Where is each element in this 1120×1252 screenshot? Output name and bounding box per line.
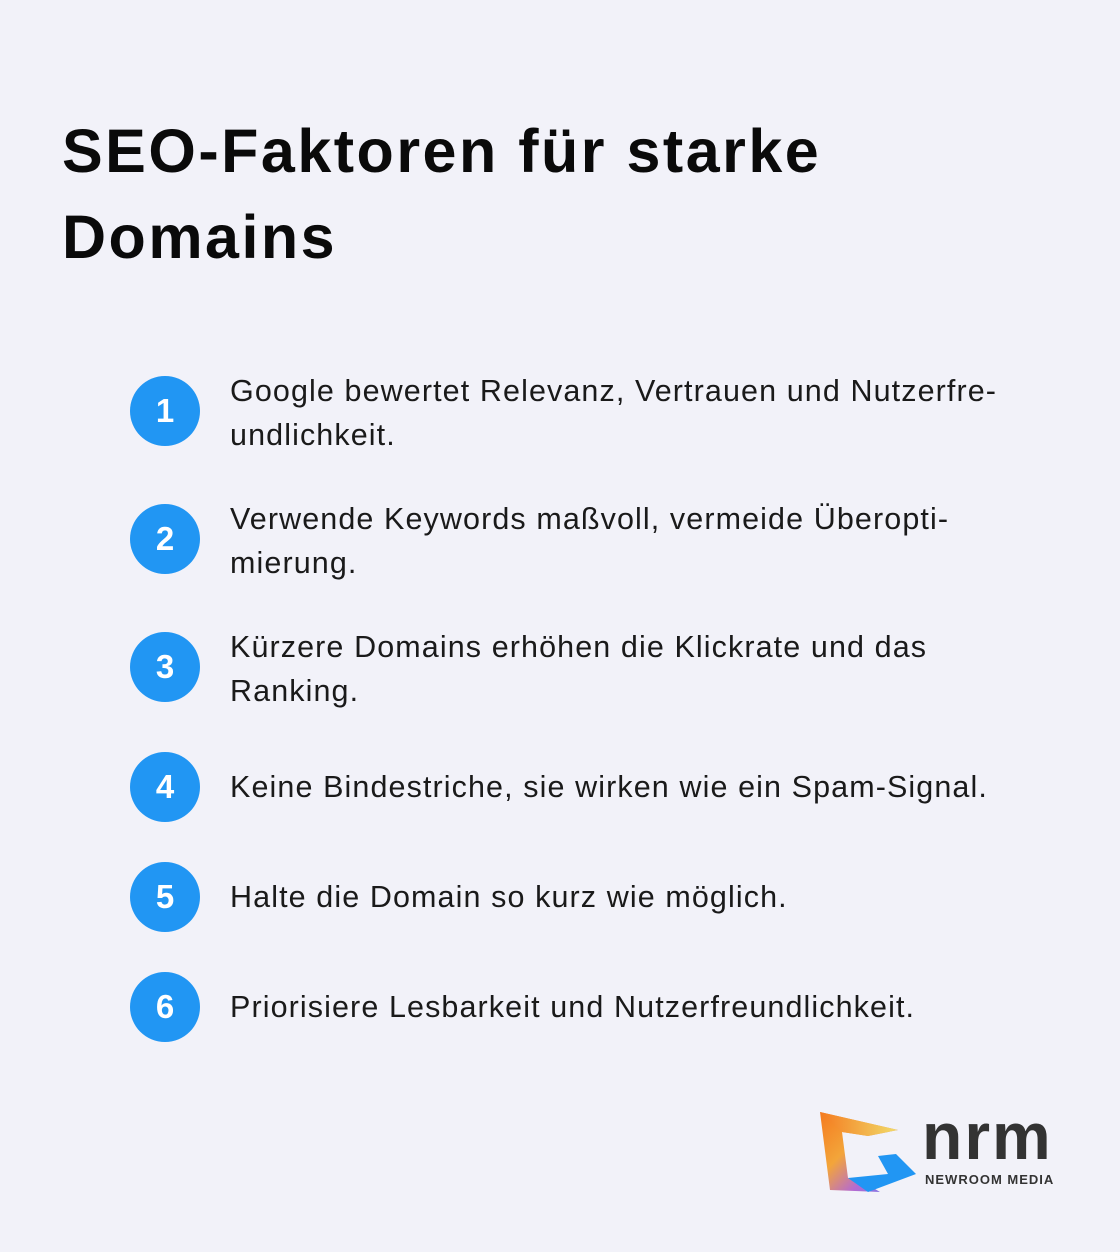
item 1 [130, 374, 997, 452]
icon: logo mark [820, 1112, 916, 1192]
item 6 [130, 972, 915, 1042]
item 2 [130, 502, 949, 580]
logo text: nrm [922, 1099, 1053, 1173]
circle 1 [130, 376, 200, 446]
title [62, 117, 821, 271]
circle 4 [130, 752, 200, 822]
circle 5 [130, 862, 200, 932]
circle 3 [130, 632, 200, 702]
text 3: Kürzere Domains erhöhen die Klickrate und das [230, 630, 927, 664]
item 4 [130, 752, 988, 822]
circle 4: 4 [156, 768, 174, 805]
circle 3: 3 [156, 648, 174, 685]
text 4: Keine Bindestriche, sie wirken wie ein Spam-Signal. [230, 770, 988, 804]
logo [820, 1099, 1054, 1192]
text 2 [230, 502, 949, 580]
logo subtitle: NEWROOM MEDIA [925, 1172, 1054, 1187]
circle 5: 5 [156, 878, 174, 915]
title: SEO-Faktoren für starke [62, 117, 821, 185]
text 3 [230, 630, 927, 708]
circle 2: 2 [156, 520, 174, 557]
title: Domains [62, 203, 337, 271]
item 3 [130, 630, 927, 708]
item 5 [130, 862, 788, 932]
circle 6: 6 [156, 988, 174, 1025]
text 1 [230, 374, 997, 452]
text 6: Priorisiere Lesbarkeit und Nutzerfreundlichkeit. [230, 990, 915, 1024]
text 3: Ranking. [230, 674, 359, 708]
text 2: Verwende Keywords maßvoll, vermeide Überopti- [230, 502, 949, 536]
circle 2 [130, 504, 200, 574]
text 2: mierung. [230, 546, 357, 580]
circle 6 [130, 972, 200, 1042]
text 1: undlichkeit. [230, 418, 396, 452]
text 5: Halte die Domain so kurz wie möglich. [230, 880, 788, 914]
text 1: Google bewertet Relevanz, Vertrauen und Nutzerfre- [230, 374, 997, 408]
circle 1: 1 [156, 392, 174, 429]
